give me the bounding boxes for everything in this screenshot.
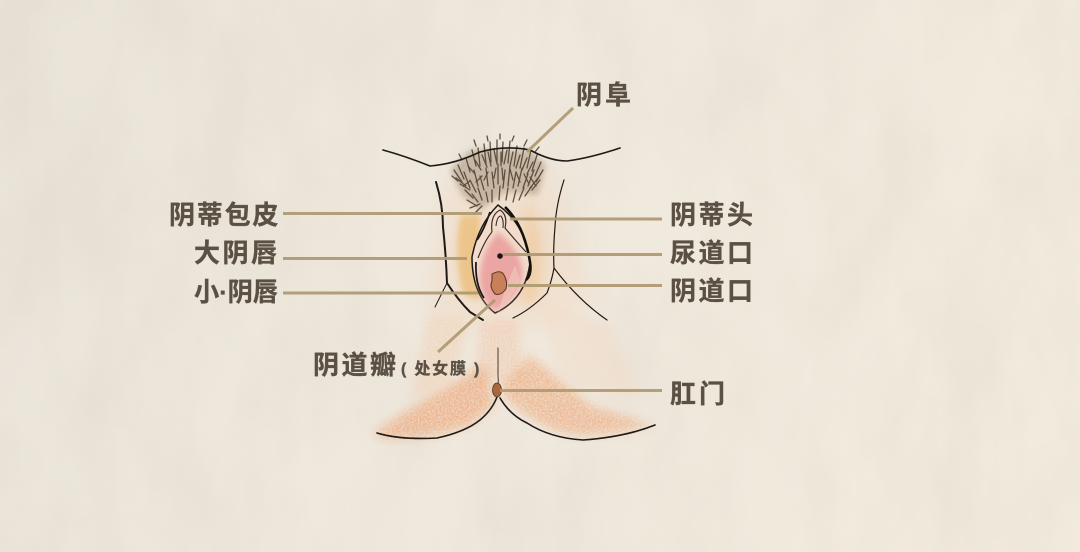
label: 阴道瓣（处女膜）: ( 处女膜 ) (401, 359, 481, 378)
label: 阴道口: 阴道口 (670, 276, 756, 306)
icon: vaginal opening (491, 272, 507, 294)
label: 尿道口: 尿道口 (670, 238, 756, 268)
hair (450, 134, 546, 214)
icon: urethral opening (497, 253, 503, 259)
label: 阴阜: 阴阜 (576, 80, 634, 110)
label: 阴蒂头: 阴蒂头 (670, 200, 756, 230)
icon: anus (492, 383, 502, 397)
body outlines (377, 148, 655, 440)
label: 大阴唇: 大阴唇 (194, 238, 280, 268)
skin shading (372, 170, 652, 438)
anatomical illustration (372, 134, 655, 440)
label: 阴道瓣（处女膜）: 阴道瓣 (313, 350, 399, 380)
label: 小阴唇: 小·阴唇 (194, 277, 278, 307)
label: 阴蒂包皮: 阴蒂包皮 (169, 200, 280, 230)
label: 阴道瓣（处女膜） (313, 350, 481, 380)
leader lines (283, 108, 662, 390)
label: 肛门: 肛门 (670, 379, 728, 409)
vulva detail (472, 205, 530, 313)
